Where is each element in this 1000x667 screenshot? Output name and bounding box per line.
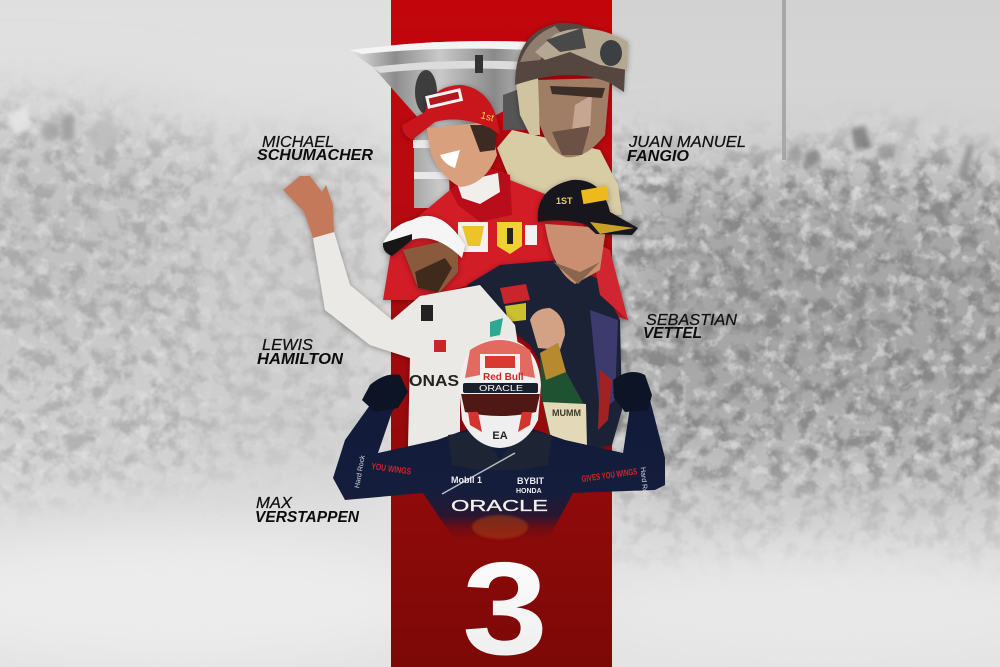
race suit — [333, 392, 665, 545]
text: 1st on cap: 1st — [479, 110, 495, 124]
label: Lewis Hamilton: LEWIS — [262, 337, 313, 354]
figure: Max Verstappen: EA — [492, 430, 508, 442]
cap — [538, 180, 638, 235]
white neck — [457, 173, 500, 204]
badges — [458, 222, 488, 252]
figure: Max Verstappen: HONDA — [516, 488, 542, 495]
figure: Max Verstappen: Hard Rock — [354, 454, 367, 489]
figure: Max Verstappen: BYBIT — [517, 476, 545, 486]
figure: Max Verstappen: GIVES YOU WINGS — [581, 466, 638, 484]
figure: Max Verstappen: Hard Rock — [639, 467, 649, 501]
label: Juan Manuel Fangio: FANGIO — [627, 148, 690, 165]
figure: Lewis Hamilton — [283, 176, 518, 447]
cap — [383, 216, 465, 258]
figure: Michael Schumacher — [383, 85, 628, 320]
label: Lewis Hamilton: HAMILTON — [257, 351, 343, 368]
helmet — [459, 338, 541, 448]
label: Max Verstappen — [255, 495, 359, 526]
label: Michael Schumacher: SCHUMACHER — [257, 147, 373, 164]
cap — [402, 85, 500, 140]
white suit and raised arm — [313, 232, 518, 447]
gloves — [362, 374, 408, 412]
figure: Sebastian Vettel — [467, 180, 638, 450]
balaclava — [516, 78, 540, 135]
figure: Max Verstappen: Mobil 1 — [451, 475, 482, 485]
race suit — [383, 165, 628, 320]
hand — [283, 176, 334, 238]
figure: Mumm champagne bottle — [540, 343, 587, 447]
figure: Sebastian Vettel: 1ST — [556, 196, 573, 206]
suit sponsors — [442, 453, 515, 494]
figure: Max Verstappen: ORACLE — [479, 384, 523, 393]
face — [545, 224, 606, 284]
figure: Max Verstappen — [333, 338, 665, 545]
trophy — [350, 41, 530, 208]
label: Michael Schumacher — [257, 134, 373, 164]
figure: Lewis Hamilton: ONAS — [409, 373, 459, 390]
face — [403, 238, 458, 292]
red centre band — [391, 0, 612, 667]
figure: Max Verstappen: YOU WINGS — [371, 461, 412, 477]
label: Max Verstappen: MAX — [256, 495, 293, 512]
label: Juan Manuel Fangio — [627, 134, 746, 165]
figure: Juan Manuel Fangio — [497, 23, 628, 215]
red sleeve of Schumacher — [590, 240, 628, 320]
race suit — [467, 260, 622, 450]
label: Sebastian Vettel: SEBASTIAN — [646, 312, 737, 329]
figure: Max Verstappen: ORACLE — [451, 498, 548, 515]
label: Max Verstappen: VERSTAPPEN — [255, 509, 359, 526]
figure: Max Verstappen: Red Bull — [483, 372, 524, 383]
shirt collar — [497, 130, 622, 215]
neck support — [448, 430, 552, 470]
suit sponsors — [421, 305, 433, 321]
helmet — [515, 23, 625, 92]
hand holding bottle — [530, 308, 565, 350]
face — [427, 122, 497, 187]
label: Sebastian Vettel — [643, 312, 737, 342]
label: Lewis Hamilton — [257, 337, 343, 368]
label: Sebastian Vettel: VETTEL — [643, 325, 702, 342]
face — [537, 78, 610, 157]
figure: Mumm champagne bottle: MUMM — [552, 408, 581, 418]
goggles — [535, 29, 628, 70]
red bull chest logo — [472, 515, 528, 539]
label: Juan Manuel Fangio: JUAN MANUEL — [628, 134, 746, 151]
label: Michael Schumacher: MICHAEL — [262, 134, 334, 151]
